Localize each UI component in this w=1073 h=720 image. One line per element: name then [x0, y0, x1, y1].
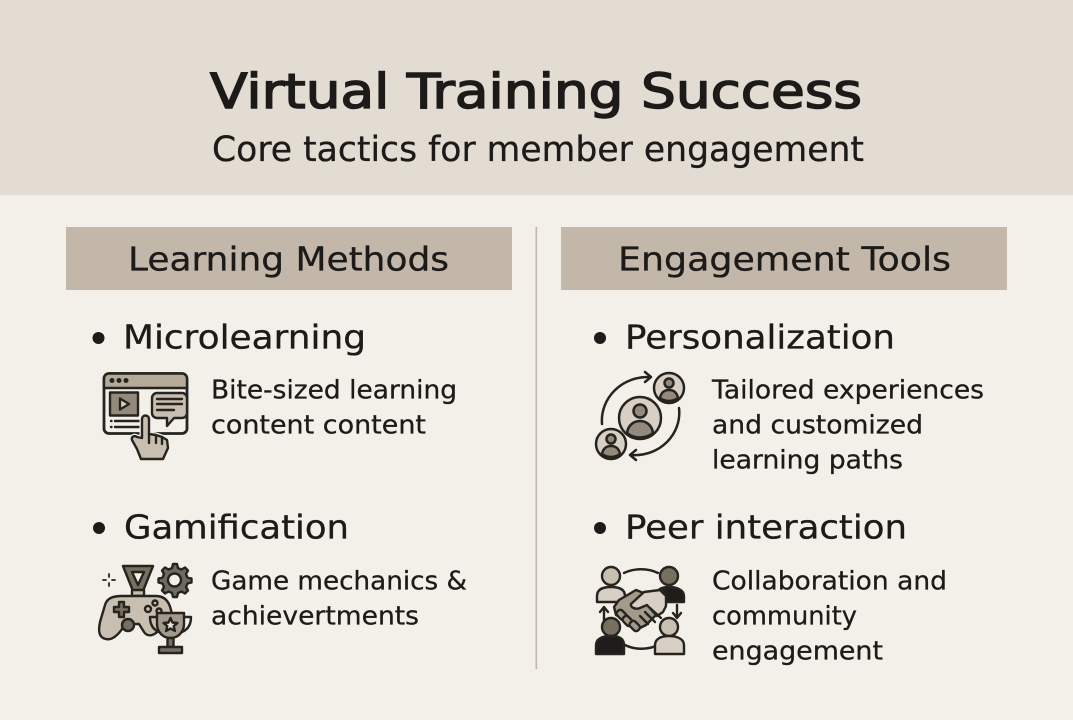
item: peer interaction: Peer interaction — [625, 508, 907, 546]
center divider — [536, 227, 537, 669]
panel: learning methods — [66, 227, 512, 653]
heading: engagement tools: Engagement Tools — [618, 240, 951, 278]
text: microlearning description — [211, 376, 457, 440]
text: peer interaction description — [712, 566, 947, 666]
item: peer interaction — [594, 508, 947, 666]
heading: learning methods — [66, 227, 512, 290]
text: peer interaction description: community — [712, 602, 857, 632]
text: personalization description: Tailored experiences — [711, 376, 984, 406]
icon: controller, medal, gear and trophy — [99, 564, 192, 653]
text: gamification description: achievertments — [211, 602, 419, 632]
text: microlearning description: Bite-sized learning — [211, 376, 457, 406]
item: gamification — [93, 508, 467, 653]
item: personalization: Personalization — [625, 318, 895, 356]
item: microlearning — [92, 318, 457, 459]
header band — [0, 0, 1073, 195]
item: personalization — [594, 318, 984, 476]
item: microlearning: Microlearning — [123, 318, 366, 356]
text: peer interaction description: Collaboration and — [712, 566, 947, 596]
text: gamification description — [211, 566, 467, 632]
panel: engagement tools — [561, 227, 1007, 666]
icon: rotating user profiles — [596, 372, 684, 460]
heading: engagement tools — [561, 227, 1007, 290]
subtitle: Core tactics for member engagement — [212, 130, 864, 170]
text: personalization description — [711, 376, 984, 476]
title: Virtual Training Success — [210, 64, 862, 120]
text: microlearning description: content content — [211, 410, 426, 440]
text: personalization description: learning paths — [712, 446, 903, 476]
icon: video window with pointing hand — [104, 374, 187, 459]
text: gamification description: Game mechanics & — [211, 566, 467, 596]
item: gamification: Gamification — [124, 508, 349, 546]
icon: handshake with four people — [596, 567, 684, 654]
text: peer interaction description: engagement — [712, 636, 883, 666]
text: personalization description: and customized — [712, 410, 923, 440]
heading: learning methods: Learning Methods — [128, 240, 449, 278]
